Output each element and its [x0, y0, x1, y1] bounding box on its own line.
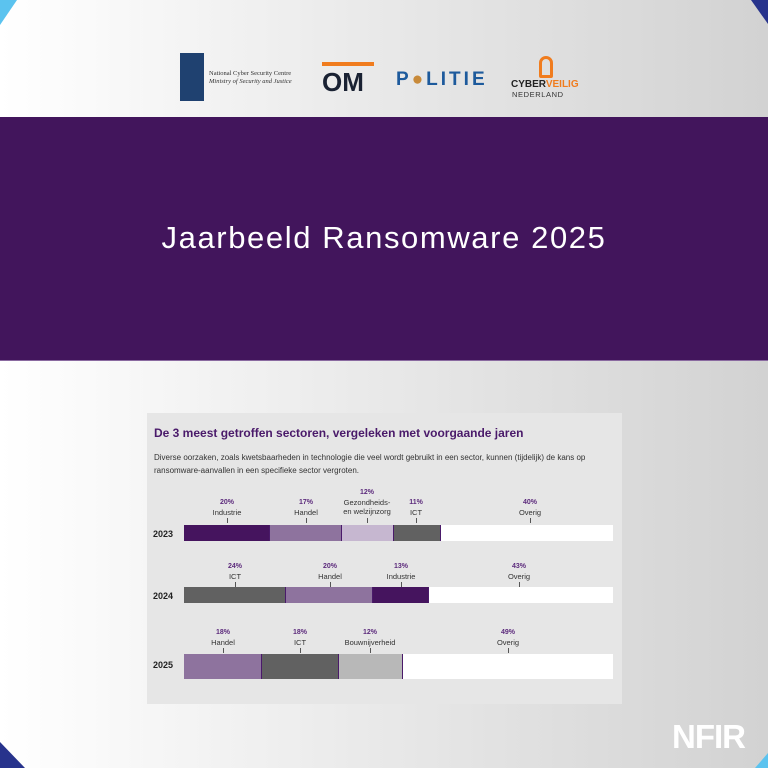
- corner: top-left triangle: [0, 0, 17, 25]
- bar: 2023: en welzijnzorg: [343, 507, 391, 516]
- panel: sector chart: [147, 413, 622, 704]
- bar: 2023: 20%: [220, 499, 234, 506]
- bar: 2023: [153, 489, 613, 541]
- bar: 2023: ICT: [410, 508, 422, 517]
- logo: NCSC: Ministry of Security and Justice: [209, 78, 292, 85]
- logo: OM: [322, 62, 374, 97]
- bar: 2025: 49%: [501, 629, 515, 636]
- logo: NCSC: [180, 53, 292, 101]
- bar: 2025: Overig: [497, 638, 519, 647]
- logo: Politie: P●LITIE: [396, 69, 488, 90]
- bar: 2025: Handel: [211, 638, 235, 647]
- logo: NCSC: National Cyber Security Centre: [209, 70, 291, 77]
- bar: 2025: 18%: [216, 629, 230, 636]
- bar: 2023: 2023: [153, 529, 173, 539]
- bar: 2023: Handel: [294, 508, 318, 517]
- logo: Cyberveilig Nederland: NEDERLAND: [512, 90, 564, 99]
- bar: 2025: 18%: [293, 629, 307, 636]
- title band: [0, 117, 768, 361]
- bar: 2025: Bouwnijverheid: [345, 638, 395, 647]
- bar: 2024: [153, 563, 613, 603]
- bar: 2023: Industrie: [213, 508, 241, 517]
- bar: 2024: Overig: [508, 572, 530, 581]
- bar: 2024: 13%: [394, 563, 408, 570]
- bar: 2023: Overig: [519, 508, 541, 517]
- bar: 2025: 12%: [363, 629, 377, 636]
- bar: 2023: Gezondheids-: [344, 498, 390, 507]
- logos row: [180, 53, 579, 101]
- bar: 2024: ICT: [229, 572, 241, 581]
- bar: 2024: Industrie: [387, 572, 415, 581]
- bar: 2024: 43%: [512, 563, 526, 570]
- corner: bottom-right triangle: [755, 753, 768, 768]
- bar: 2025: [153, 629, 613, 679]
- bar: 2023: 40%: [523, 499, 537, 506]
- bar: 2023: 12%: [360, 489, 374, 496]
- logo: NFIR: NFIR: [672, 718, 745, 755]
- bar: 2024: Handel: [318, 572, 342, 581]
- logo: Cyberveilig Nederland: CYBERVEILIG: [511, 79, 579, 90]
- bar: 2023: 11%: [409, 499, 423, 506]
- bar: 2024: 24%: [228, 563, 242, 570]
- corner: bottom-left triangle: [0, 742, 25, 768]
- bar: 2024: 20%: [323, 563, 337, 570]
- chart heading: De 3 meest getroffen sectoren, vergeleken met voorgaande jaren: [154, 426, 523, 440]
- title: Jaarbeeld Ransomware 2025: [162, 220, 606, 255]
- bar: 2025: 2025: [153, 660, 173, 670]
- logo: Cyberveilig Nederland: [511, 56, 579, 99]
- chart description: Diverse oorzaken, zoals kwetsbaarheden in technologie die veel wordt gebruikt in een sector, kunnen (tijdelijk) de kans op ransomware-aanvallen in een specifieke sector vergroten.: [154, 453, 585, 475]
- bar: 2025: ICT: [294, 638, 306, 647]
- logo: OM: OM: [322, 67, 364, 97]
- bar: 2023: 17%: [299, 499, 313, 506]
- bar: 2024: 2024: [153, 591, 173, 601]
- corner: top-right triangle: [751, 0, 768, 24]
